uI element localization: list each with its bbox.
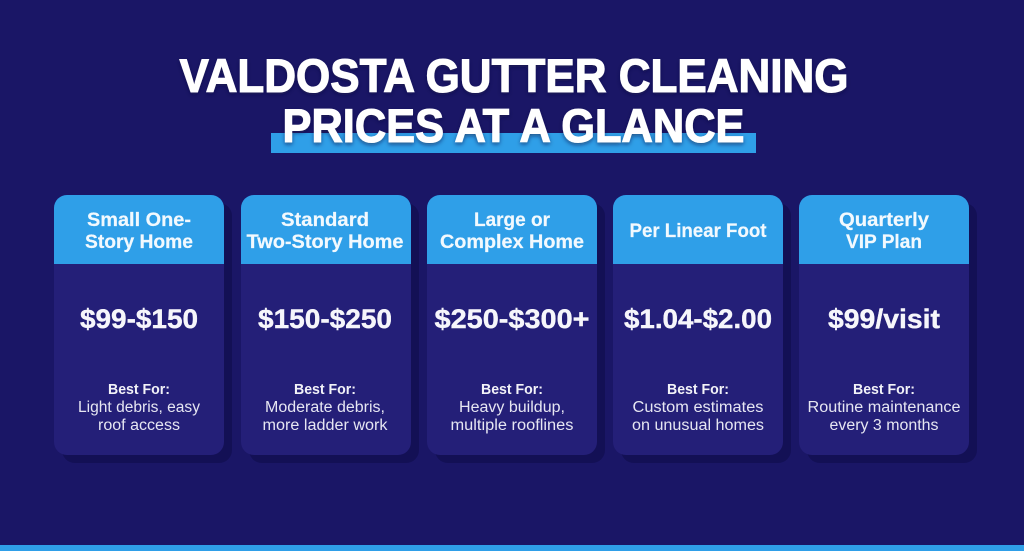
description: on unusual homes [632, 417, 764, 434]
description: every 3 months [830, 417, 939, 434]
title line 1: VALDOSTA GUTTER CLEANING [180, 49, 848, 102]
price: $250-$300+ [434, 304, 590, 334]
bottom accent bar [0, 545, 1024, 551]
best for: Best For: [481, 381, 543, 398]
title [180, 49, 848, 153]
price: $99-$150 [80, 304, 198, 334]
card heading: Per Linear Foot [630, 220, 767, 242]
description: Routine maintenance [808, 399, 960, 416]
panel: per linear foot [613, 195, 791, 463]
description: roof access [98, 417, 180, 434]
card heading: Large or [474, 209, 550, 231]
panel: standard two-story home [241, 195, 419, 463]
card heading: Standard [281, 209, 369, 231]
card heading: Complex Home [440, 231, 584, 253]
best for: Best For: [853, 381, 915, 398]
description: Heavy buildup, [459, 399, 565, 416]
price: $1.04-$2.00 [624, 304, 772, 334]
best for: Best For: [108, 381, 170, 398]
title underline highlight [271, 133, 756, 153]
card heading: Story Home [85, 231, 193, 253]
best for: Best For: [667, 381, 729, 398]
card heading: Quarterly [839, 209, 929, 231]
card heading: Two-Story Home [246, 231, 404, 253]
price: $150-$250 [258, 304, 392, 334]
panel: small one-story home [54, 195, 232, 463]
description: Moderate debris, [265, 399, 385, 416]
description: more ladder work [262, 417, 388, 434]
card heading: Small One- [87, 209, 191, 231]
title line 2: PRICES AT A GLANCE [282, 99, 744, 152]
panel: large or complex home [427, 195, 605, 463]
panel: quarterly vip plan [799, 195, 977, 463]
description: multiple rooflines [450, 417, 574, 434]
description: Custom estimates [632, 399, 764, 416]
price: $99/visit [828, 304, 940, 334]
card heading: VIP Plan [846, 231, 922, 253]
description: Light debris, easy [78, 399, 200, 416]
best for: Best For: [294, 381, 356, 398]
